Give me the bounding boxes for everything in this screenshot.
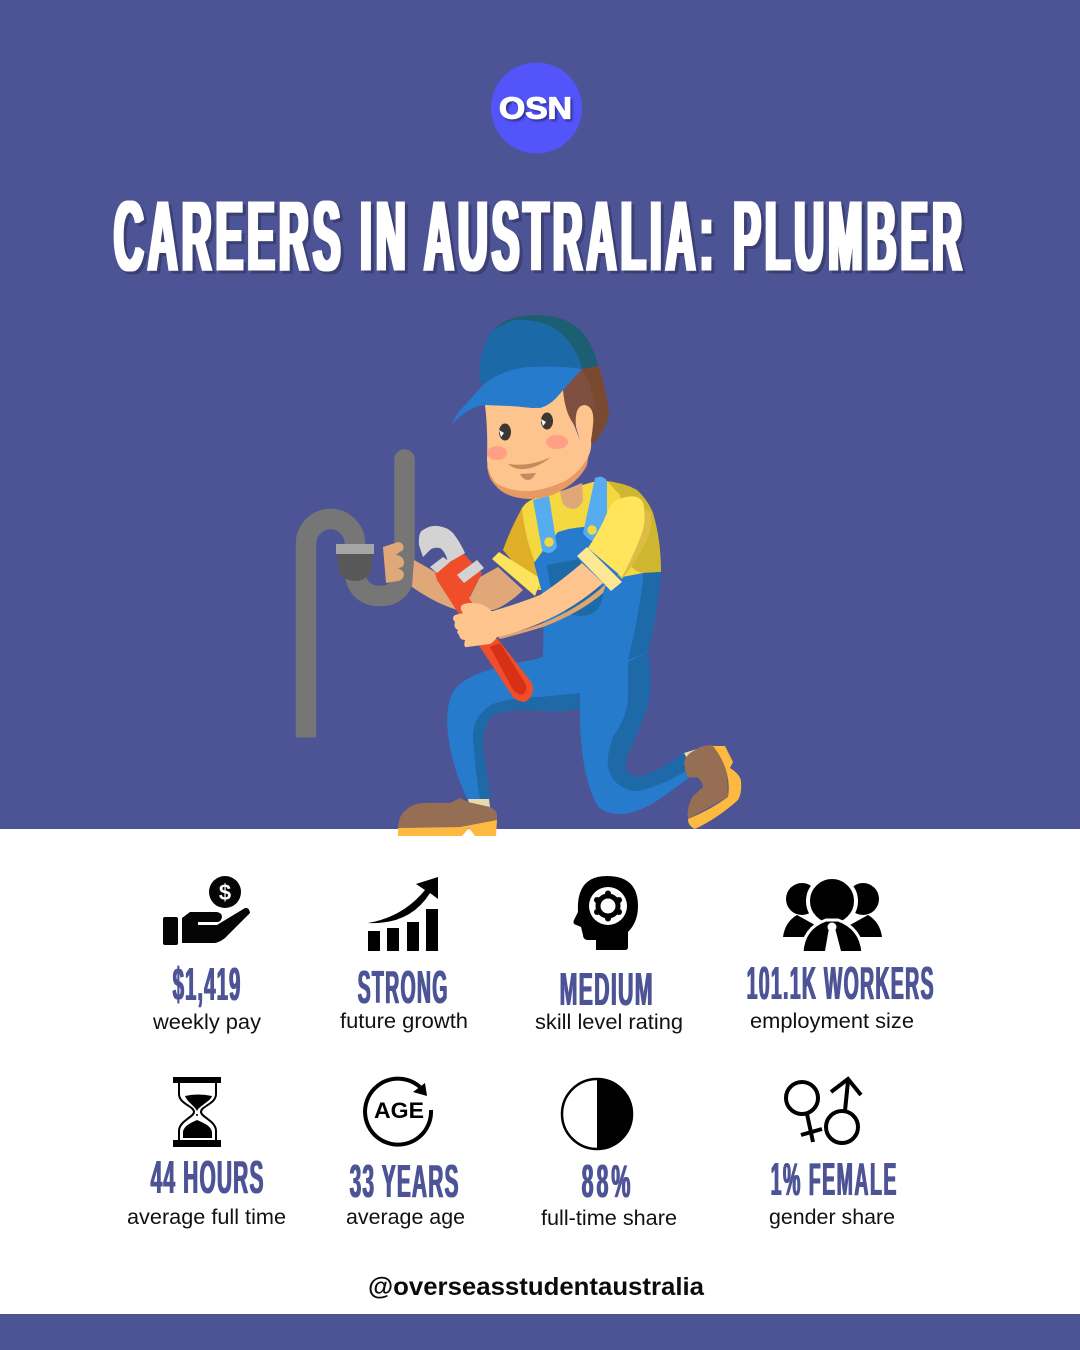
label: employment size [750, 1010, 914, 1033]
stat: full-time share [541, 1078, 677, 1230]
head [485, 366, 609, 499]
illustration: plumber fixing pipe [306, 315, 741, 836]
value: 1% FEMALE [771, 1153, 896, 1205]
label: average full time [127, 1206, 286, 1229]
stat: future growth [340, 877, 468, 1033]
front arm and hand [453, 563, 606, 647]
overall straps and buttons [533, 477, 607, 553]
value: 88% [582, 1155, 630, 1207]
label: skill level rating [535, 1011, 683, 1034]
social handle: @overseasstudentaustralia [368, 1273, 705, 1301]
back arm and hand [383, 542, 523, 610]
value: MEDIUM [560, 963, 653, 1015]
logo: OSN badge: OSN [499, 90, 572, 126]
icon: hand holding coin [163, 876, 250, 945]
stat: average full time [127, 1077, 286, 1229]
icon: age cycle: AGE [374, 1098, 424, 1123]
stat: skill level rating [535, 876, 683, 1034]
shirt and torso [492, 481, 661, 596]
icon: head with gear [574, 876, 638, 950]
value: STRONG [358, 961, 447, 1013]
neck [560, 483, 583, 509]
label: weekly pay [152, 1011, 262, 1034]
shoes and socks [398, 745, 741, 836]
right sleeve [577, 496, 651, 591]
label: full-time share [541, 1207, 677, 1230]
cap [452, 315, 598, 425]
icon: hourglass [173, 1077, 221, 1147]
stat: weekly pay [152, 876, 262, 1034]
icon: age cycle [365, 1079, 431, 1145]
icon: hand holding coin: $ [219, 880, 231, 905]
logo: OSN badge [491, 62, 582, 154]
title: CAREERS IN AUSTRALIA: PLUMBER [114, 182, 962, 293]
value: 101.1K WORKERS [747, 957, 933, 1009]
label: average age [346, 1206, 465, 1229]
stat: average age [346, 1079, 465, 1229]
icon: gender symbols [786, 1079, 861, 1143]
icon: group of people [783, 877, 882, 957]
label: gender share [769, 1206, 895, 1229]
pipe [306, 449, 415, 738]
white stats panel [0, 829, 1080, 1314]
label: future growth [340, 1010, 468, 1033]
bottom band [0, 1314, 1080, 1350]
stat: gender share [769, 1079, 896, 1229]
wrench [419, 526, 533, 702]
overalls body and legs [447, 525, 690, 814]
stat: employment size [747, 877, 934, 1033]
value: 33 YEARS [350, 1154, 458, 1207]
icon: half-filled circle [562, 1078, 633, 1150]
icon: rising bar chart [368, 877, 438, 951]
value: 44 HOURS [151, 1150, 263, 1203]
value: $1,419 [173, 957, 240, 1010]
